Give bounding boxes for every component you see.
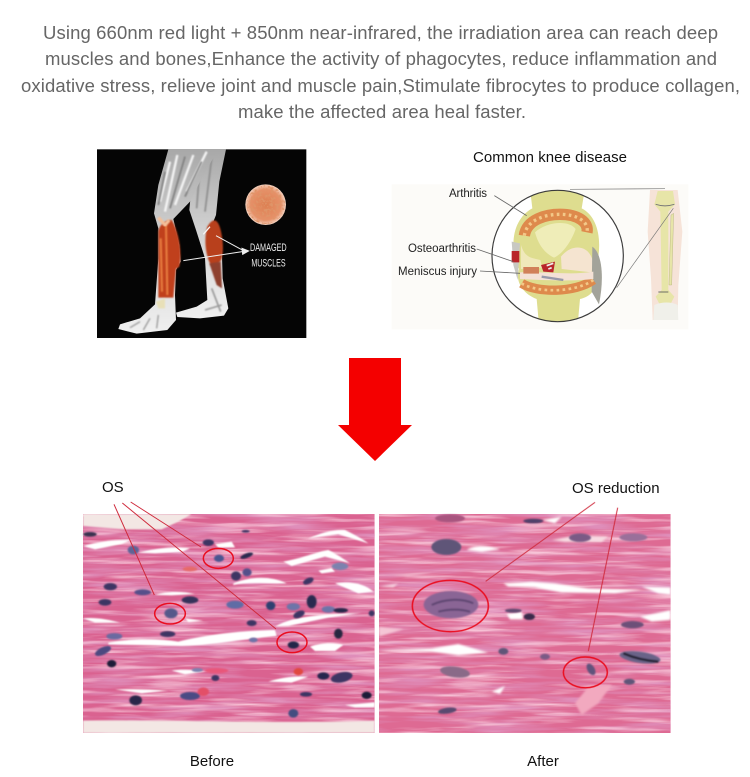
panel: after tissue (379, 502, 671, 733)
panel: before tissue (83, 502, 375, 733)
intro paragraph: Using 660nm red light + 850nm near-infrared, the irradiation area can reach deep (43, 22, 718, 43)
arthritis cartilage band (524, 214, 587, 236)
arrow: damaged muscles pointer (183, 236, 249, 261)
knee labels: Osteoarthritis (408, 243, 476, 255)
icon: knee circle (492, 188, 623, 325)
knee labels (398, 188, 487, 278)
meniscus (520, 272, 593, 280)
nuclei (83, 530, 375, 718)
callout circles: OS reduction (412, 580, 607, 688)
label: before: Before (190, 753, 234, 770)
knee labels: Meniscus injury (398, 266, 477, 278)
label: OS: OS (102, 479, 124, 496)
icon: leg bones (648, 190, 682, 320)
icon: front leg (118, 149, 218, 334)
knee labels: Arthritis (449, 188, 487, 200)
label: damaged muscles: DAMAGED (250, 242, 287, 254)
lower cartilage band (522, 280, 593, 290)
callout lines: OS (114, 502, 276, 629)
white gaps (83, 514, 375, 733)
label: damaged muscles: MUSCLES (251, 257, 286, 269)
callout lines (570, 189, 673, 288)
label: damaged muscles (250, 242, 287, 269)
icon: muscle cell ball (245, 184, 286, 225)
label: after: After (527, 753, 559, 770)
icon: rear leg (176, 149, 228, 318)
arrow: red down arrow (338, 358, 412, 461)
callout lines: OS reduction (486, 502, 618, 651)
panel: knee diagram (476, 188, 682, 322)
panel: damaged leg muscles (97, 149, 306, 338)
label: OS reduction: OS reduction (572, 480, 660, 497)
intro paragraph: make the affected area heal faster. (238, 101, 526, 122)
intro paragraph (21, 22, 740, 122)
callout circles: OS (155, 548, 307, 653)
intro paragraph: oxidative stress, relieve joint and muscle pain,Stimulate fibrocytes to produce collagen, (21, 75, 740, 96)
intro paragraph: muscles and bones,Enhance the activity of phagocytes, reduce inflammation and (45, 48, 717, 69)
heading: common knee disease: Common knee disease (473, 149, 627, 166)
